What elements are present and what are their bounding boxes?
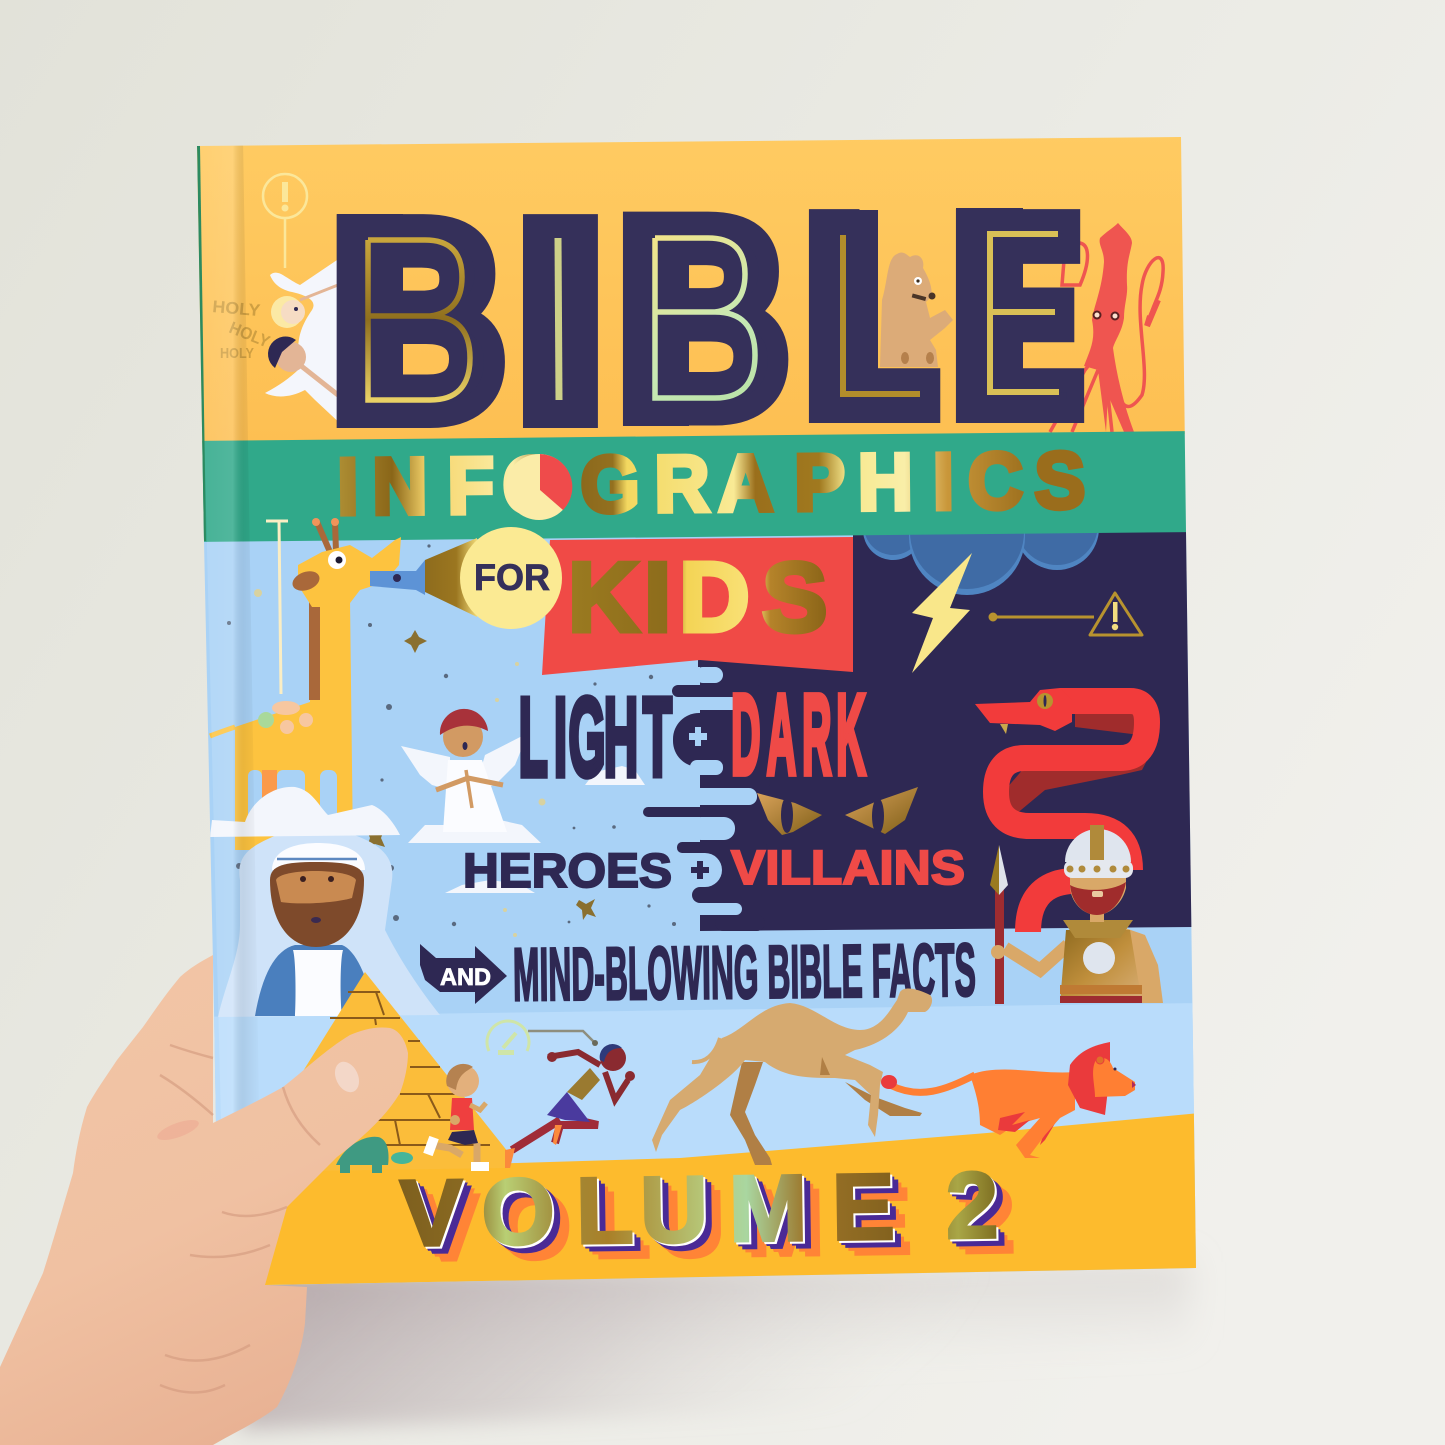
thumb nail	[330, 1058, 364, 1096]
illustration: sky stars and dots	[227, 544, 676, 953]
text: holy holy holy: HOLY	[227, 318, 273, 352]
illustration: soldier	[990, 825, 1163, 1004]
book shadow	[240, 1262, 1190, 1430]
spine crease shading	[197, 140, 262, 1285]
illustration: boy runner	[423, 1064, 489, 1171]
heading: KIDS: KIDS	[568, 542, 827, 652]
illustration: hand holding book	[0, 955, 408, 1445]
title: BIBLE: E	[951, 162, 1083, 470]
title: BIBLE: B	[617, 164, 789, 472]
title: BIBLE: L	[804, 162, 937, 470]
panel: lower light blue strip	[190, 1003, 1200, 1290]
icon: villain eyes	[757, 787, 918, 835]
illustration: angels behind B	[212, 174, 345, 428]
illustration: singing angel	[401, 708, 520, 825]
title: VOLUME 2: VOLUME 2	[399, 1152, 999, 1266]
heading: MIND-BLOWING BIBLE FACTS: MIND-BLOWING BIBLE FACTS	[513, 929, 976, 1017]
title: VOLUME 2: VOLUME 2	[407, 1159, 1007, 1273]
hand creases	[160, 1045, 320, 1392]
icon: speedometer	[487, 1021, 598, 1055]
icon: warning triangle	[990, 593, 1142, 635]
illustration: nib pen	[370, 538, 477, 617]
illustration: bear	[880, 252, 953, 367]
heading: VILLAINS: VILLAINS	[731, 842, 965, 895]
illustration: squid tentacles and body	[1050, 223, 1163, 432]
illustration: lion	[881, 1042, 1136, 1158]
icon: lightning bolt	[912, 553, 972, 673]
title: VOLUME 2: VOLUME 2	[416, 1167, 1016, 1280]
icon: pie chart O	[516, 454, 572, 520]
illustration: Moses halo	[218, 832, 440, 1017]
icon: plus dark	[691, 861, 709, 879]
text: holy holy holy: HOLY	[220, 345, 254, 362]
panel: navy dark half	[643, 531, 1195, 931]
panel: red banner	[542, 537, 853, 675]
panel: top yellow	[190, 130, 1190, 443]
panel: book cover	[190, 130, 1200, 1290]
illustration: pyramid	[240, 972, 508, 1172]
panel: sky blue	[190, 530, 1200, 1290]
icon: plus light	[689, 727, 707, 746]
illustration: Moses	[255, 843, 375, 1016]
heading: DARK: DARK	[731, 671, 866, 797]
title: VOLUME 2: VOLUME 2	[410, 1162, 1010, 1276]
illustration: white clouds	[210, 766, 645, 893]
illustration: camel	[652, 989, 932, 1165]
spine edge line	[197, 146, 206, 541]
text: holy holy holy	[213, 300, 271, 358]
badge: FOR circle: FOR	[474, 557, 550, 598]
illustration: sprinter	[505, 1044, 635, 1168]
foil inline on BIBLE	[368, 234, 1059, 400]
icon: exclamation alert	[263, 174, 307, 268]
text: holy holy holy: HOLY	[212, 297, 262, 320]
panel: storm cloud	[864, 532, 1099, 595]
heading row: AND arrow	[420, 944, 507, 1004]
title: BIBLE: B	[331, 166, 505, 475]
illustration: turtle	[336, 1137, 413, 1173]
marker T line	[266, 521, 288, 694]
illustration: giraffe	[210, 518, 401, 850]
title: INFOGRAPHICS band	[190, 431, 1195, 542]
title: BIBLE: I	[515, 166, 606, 475]
heading row: AND arrow: AND	[440, 964, 491, 991]
badge: FOR circle	[460, 527, 562, 629]
title: VOLUME 2: VOLUME 2	[403, 1156, 1003, 1270]
title: VOLUME 2: VOLUME 2	[401, 1154, 1001, 1268]
heading: LIGHT: LIGHT	[519, 677, 672, 800]
heading: HEROES: HEROES	[463, 845, 672, 898]
panel: yellow ground	[265, 1114, 1196, 1285]
title: BIBLE	[336, 208, 1084, 428]
heading: INFOGRAPHICS: INFOGRAPHICS	[337, 435, 1086, 532]
illustration: snake	[975, 688, 1155, 932]
